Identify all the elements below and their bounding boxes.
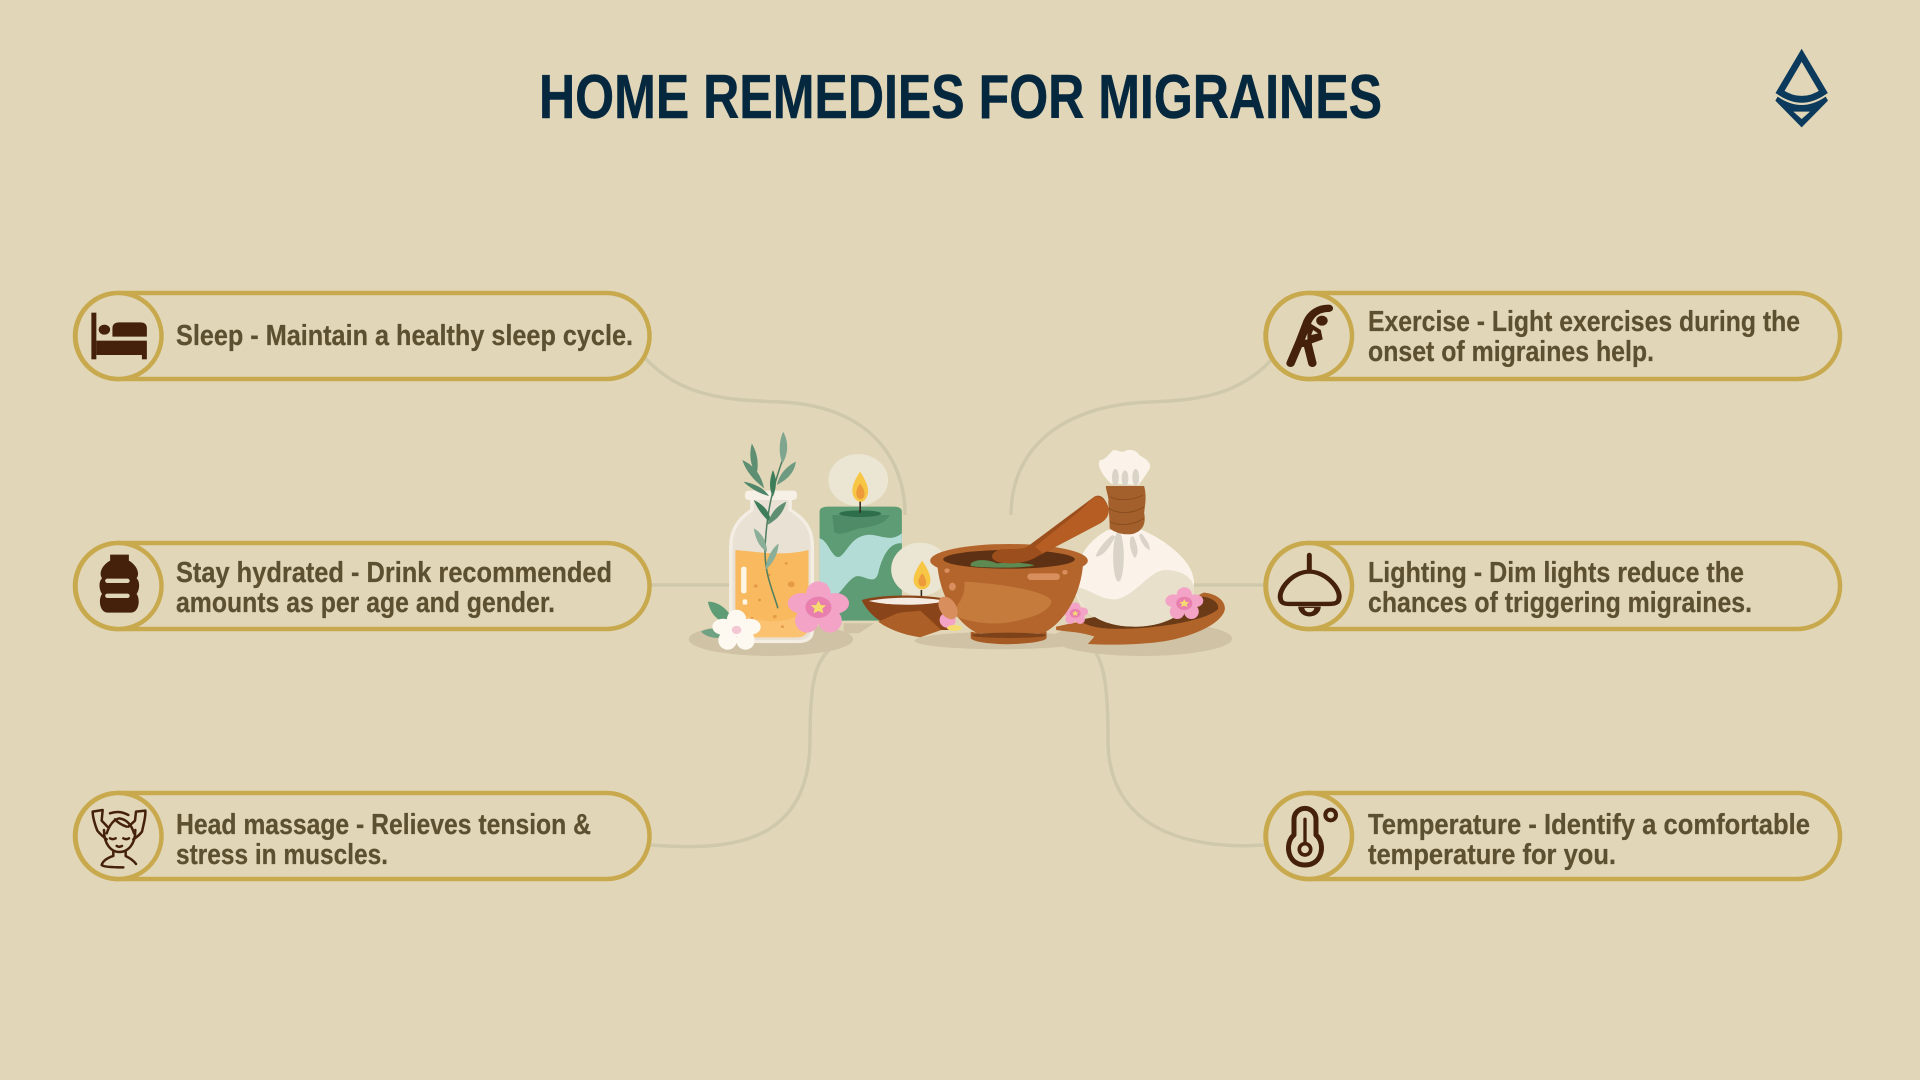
text: temperature: temperature for you. xyxy=(1368,839,1616,871)
text: head massage: Head massage - Relieves tension & xyxy=(176,809,591,841)
icon: bed xyxy=(91,313,147,359)
text: stay hydrated: amounts as per age and gender. xyxy=(176,587,555,619)
icon: thermometer xyxy=(1289,808,1336,865)
panel: sleep xyxy=(75,293,650,379)
candle: small bowl xyxy=(862,543,962,637)
text: exercise: onset of migraines help. xyxy=(1368,336,1654,368)
mortar and pestle xyxy=(930,496,1109,644)
shadows xyxy=(689,621,1232,656)
title: HOME REMEDIES FOR MIGRAINES xyxy=(539,63,1382,132)
illustration: remedies still life xyxy=(689,432,1232,656)
candle: green xyxy=(820,454,902,621)
panel: lighting xyxy=(1266,543,1840,629)
text: head massage: stress in muscles. xyxy=(176,839,388,871)
compress pouch with plate xyxy=(1056,450,1225,645)
connector lines xyxy=(645,358,1273,847)
text: stay hydrated: Stay hydrated - Drink recommended xyxy=(176,557,612,589)
icon: head massage xyxy=(93,810,145,867)
icon: exercise xyxy=(1291,308,1329,363)
panel: exercise xyxy=(1266,293,1840,379)
panel: temperature xyxy=(1266,793,1840,879)
icon: bottle xyxy=(100,555,139,613)
white flower xyxy=(712,610,761,650)
jar with oil and herbs xyxy=(701,432,849,650)
text: lighting: chances of triggering migraines. xyxy=(1368,587,1752,619)
panel: head massage xyxy=(75,793,650,879)
icon: hanging lamp xyxy=(1280,555,1339,616)
icon: logo drop xyxy=(1775,55,1828,127)
text: sleep: Sleep - Maintain a healthy sleep cycle. xyxy=(176,320,633,352)
text: exercise: Exercise - Light exercises during the xyxy=(1368,306,1800,338)
panel: stay hydrated xyxy=(75,543,650,629)
text: temperature: Temperature - Identify a comfortable xyxy=(1368,809,1810,841)
text: lighting: Lighting - Dim lights reduce the xyxy=(1368,557,1744,589)
